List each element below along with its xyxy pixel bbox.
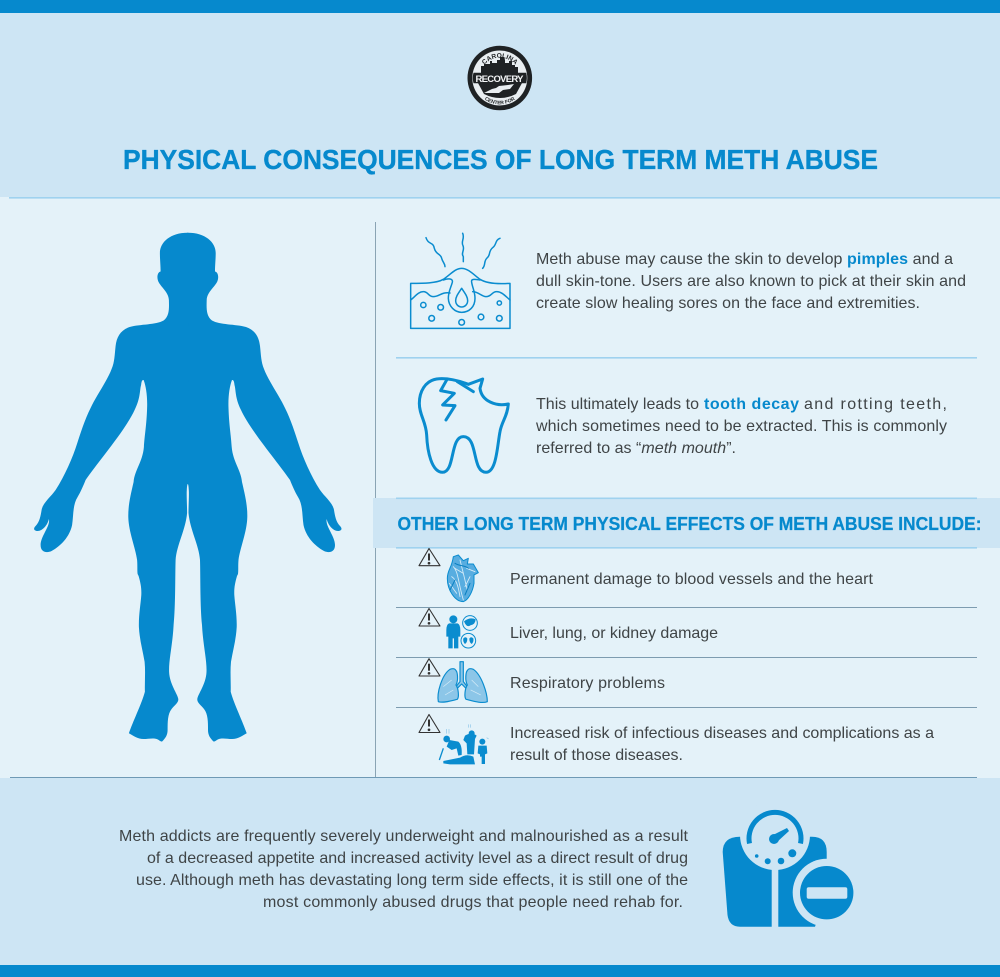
text: blood vessels: Permanent damage to blood vessels and the heart <box>510 571 874 588</box>
skin text: create slow healing sores on the face and extremities. <box>536 295 920 312</box>
logo: Carolina Recovery Center: CENTER FOR <box>485 97 515 104</box>
title: PHYSICAL CONSEQUENCES OF LONG TERM METH ABUSE <box>123 144 878 175</box>
icon: scale with minus sign <box>723 800 861 928</box>
skin text: dull skin-tone. Users are also known to pick at their skin and <box>536 273 966 290</box>
band: other effects heading <box>373 498 1000 549</box>
text: infectious diseases: Increased risk of infectious diseases and complications as a <box>510 725 934 742</box>
icon: warning triangle 1 <box>419 548 440 566</box>
tooth text: referred to as “meth mouth”. <box>536 440 736 457</box>
header panel <box>0 0 1000 197</box>
icon: heart <box>447 555 478 602</box>
icon: person with organs <box>446 615 477 648</box>
footer paragraph: use. Although meth has devastating long term side effects, it is still one of the <box>136 872 688 889</box>
footer paragraph: Meth addicts are frequently severely underweight and malnourished as a result <box>119 828 689 845</box>
tooth text <box>535 396 947 457</box>
icon: warning triangle 2 <box>419 608 440 626</box>
tooth text: tooth decay <box>704 396 799 413</box>
text: respiratory: Respiratory problems <box>510 675 665 692</box>
tooth text: and rotting teeth, <box>804 396 947 413</box>
icon: warning triangle 3 <box>419 659 440 676</box>
bottom bar <box>0 965 1000 977</box>
top bar <box>0 0 1000 13</box>
band: other effects heading: OTHER LONG TERM PHYSICAL EFFECTS OF METH ABUSE INCLUDE: <box>398 513 982 534</box>
footer paragraph: of a decreased appetite and increased activity level as a direct result of drug <box>147 850 688 867</box>
icon: sick people <box>439 724 489 764</box>
icon: lungs <box>438 662 487 702</box>
human body silhouette <box>34 233 341 741</box>
tooth text: This ultimately leads to <box>536 396 699 413</box>
text: infectious diseases: result of those diseases. <box>510 747 683 764</box>
icon: warning triangle 4 <box>419 714 440 732</box>
icon: skin pimple <box>411 233 510 328</box>
footer paragraph: most commonly abused drugs that people need rehab for. <box>263 894 683 911</box>
text: organs: Liver, lung, or kidney damage <box>510 625 718 642</box>
logo: Carolina Recovery Center: RECOVERY <box>476 74 524 85</box>
logo: Carolina Recovery Center: CAROLINA <box>482 53 518 65</box>
text: infectious diseases <box>510 725 934 764</box>
logo: Carolina Recovery Center <box>468 46 532 110</box>
icon: cracked tooth <box>419 379 508 472</box>
skin text <box>536 251 966 312</box>
skin text: Meth abuse may cause the skin to develop pimples and a <box>536 251 953 268</box>
footer panel <box>0 778 1000 977</box>
tooth text: which sometimes need to be extracted. This is commonly <box>535 418 947 435</box>
footer paragraph <box>119 828 689 911</box>
